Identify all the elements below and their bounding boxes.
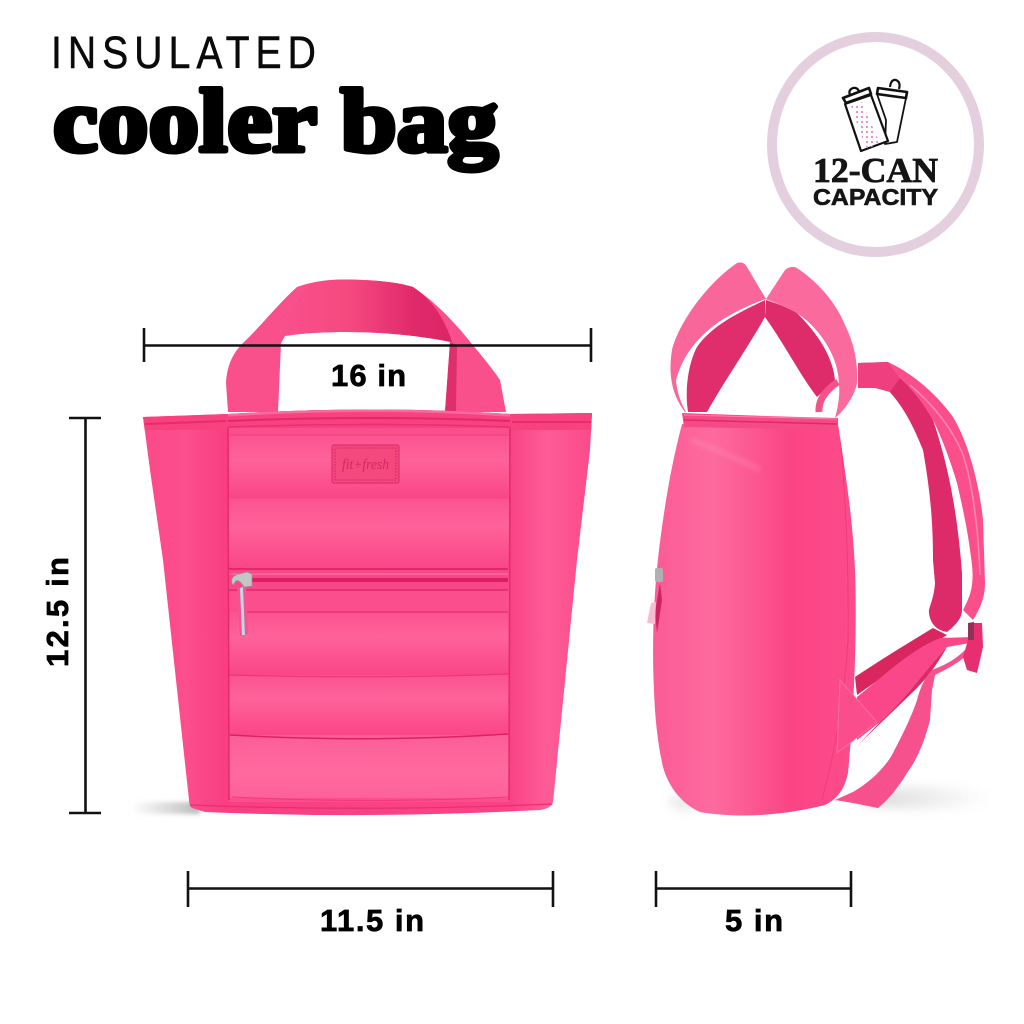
middle strap <box>857 637 973 740</box>
rear seam <box>822 430 848 800</box>
logo patch <box>332 445 399 483</box>
pull tab <box>237 587 248 636</box>
line <box>188 871 553 907</box>
zipper slit <box>655 583 662 633</box>
front handle <box>226 279 506 412</box>
top collar <box>143 408 592 430</box>
strap outer edge <box>888 362 985 620</box>
capacity badge <box>772 37 979 252</box>
zipper pull <box>232 572 252 636</box>
icon: two cans <box>843 80 907 151</box>
front zipper pocket <box>229 568 509 612</box>
quilted section 2 <box>229 504 509 544</box>
slider <box>655 568 663 582</box>
title <box>51 27 498 171</box>
bag body <box>143 410 592 815</box>
label: 16 in <box>331 358 406 393</box>
quilted section 3 <box>230 617 508 652</box>
icon: back can <box>877 80 907 144</box>
lower webbing straps <box>835 622 983 808</box>
side handle back face, right <box>765 300 835 397</box>
badge text: 12-can: 12-CAN <box>813 151 938 190</box>
icon: front can <box>843 88 888 151</box>
upper strap <box>855 628 947 695</box>
dimension: 11.5 in <box>188 871 553 938</box>
lower strap <box>835 650 966 808</box>
seams <box>190 428 552 808</box>
strap loop <box>819 382 838 412</box>
label: 11.5 in <box>320 903 424 938</box>
buckle <box>963 623 983 673</box>
title line: insulated: INSULATED <box>51 27 316 78</box>
body highlight <box>690 440 760 470</box>
ground shadow: side bag <box>669 787 995 810</box>
slider <box>232 572 252 587</box>
badge text: capacity: CAPACITY <box>813 184 938 210</box>
side view of bag <box>647 262 985 816</box>
backpack strap <box>858 362 985 632</box>
strap inner padding <box>858 362 962 632</box>
quilted section 1 <box>229 440 509 476</box>
quilted section 5 <box>229 735 509 798</box>
front view of bag <box>143 279 592 815</box>
label: 12.5 in <box>40 557 75 667</box>
side zipper <box>647 568 663 633</box>
dimension: 5 in <box>656 871 851 938</box>
dimension: 12.5 in <box>40 418 101 813</box>
line <box>144 328 591 362</box>
line <box>69 418 101 813</box>
pull tab <box>647 602 656 624</box>
quilted section 4 <box>230 680 508 714</box>
line <box>656 871 851 907</box>
side body <box>653 424 856 816</box>
side handle front, left <box>671 262 766 412</box>
corner tab <box>837 680 877 753</box>
dimension: 16 in <box>144 328 591 393</box>
side collar <box>682 413 838 430</box>
side handle front, right <box>766 267 857 418</box>
logo text: fit+fresh <box>342 457 389 473</box>
label: 5 in <box>725 903 783 938</box>
side handle back face, left <box>687 300 765 412</box>
front panel <box>229 428 509 802</box>
ground shadow: front bag <box>130 802 200 814</box>
title line: cooler bag: cooler bag <box>53 72 498 171</box>
badge ring <box>772 37 979 252</box>
